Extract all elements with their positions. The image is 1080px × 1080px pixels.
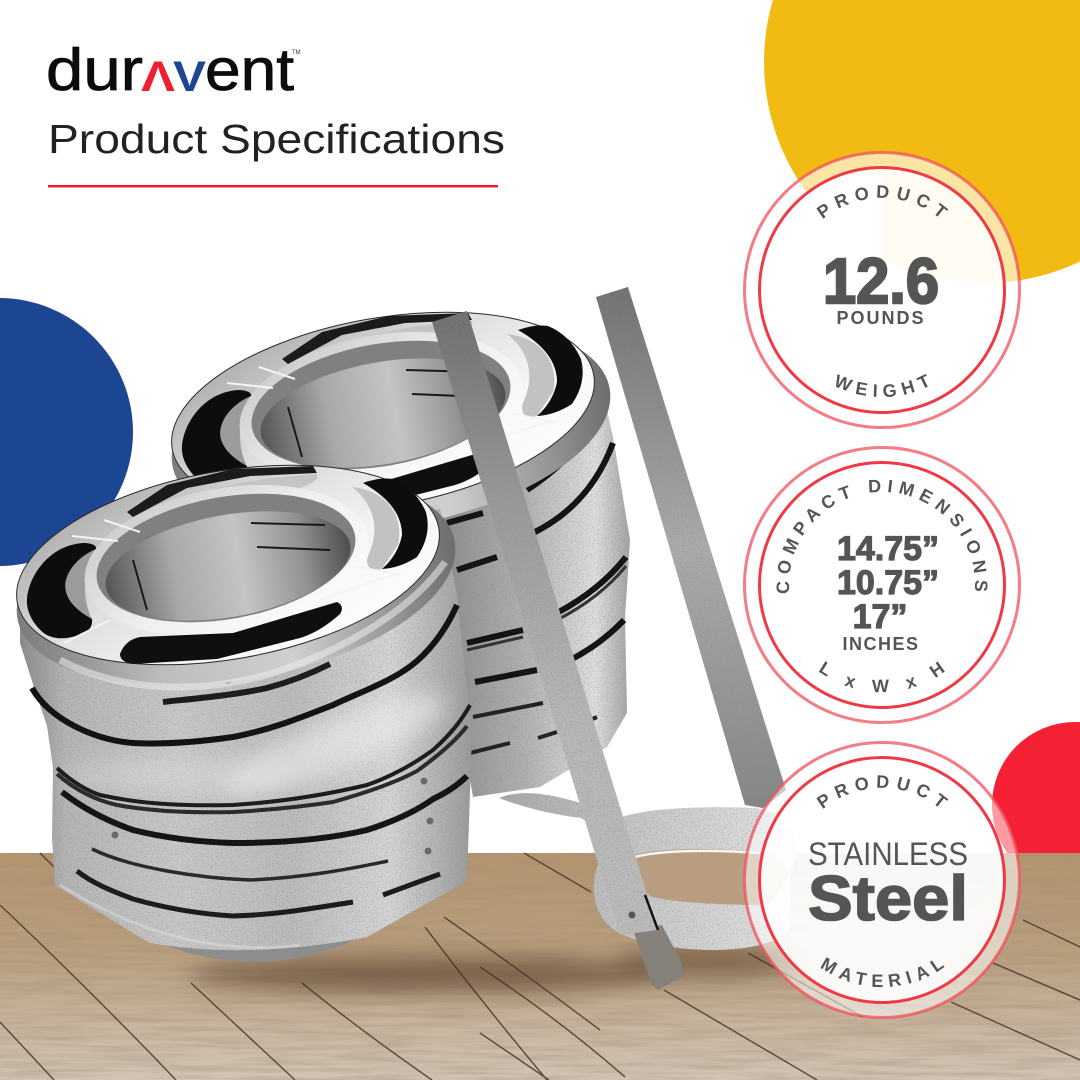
rear metal strap xyxy=(596,287,786,808)
logo: duravent: V xyxy=(173,53,206,101)
red decorative circle xyxy=(992,722,1080,888)
logo: duravent xyxy=(46,37,301,103)
heading underline xyxy=(48,185,498,188)
curved label: L x W x H: L x W x H xyxy=(819,661,945,692)
logo: duravent: Λ xyxy=(141,53,175,101)
shadow under pipes xyxy=(190,947,805,993)
dimension values: 10.75” xyxy=(837,564,939,602)
weight value: 12.6 xyxy=(823,245,939,317)
rear vent pipe xyxy=(155,282,630,797)
front vent pipe xyxy=(0,435,472,962)
badge: product material xyxy=(743,741,1021,1019)
curved label: product: PRODUCT xyxy=(816,775,948,809)
heading: Product Specifications: Product Specifications xyxy=(48,116,505,162)
curved label: compact dimensions: COMPACT DIMENSIONS xyxy=(776,480,988,594)
metal strap band ring xyxy=(499,793,797,950)
badge: compact dimensions xyxy=(743,446,1021,724)
material line: stainless: STAINLESS xyxy=(808,836,968,872)
dimension values xyxy=(837,530,939,636)
dimension values: 14.75” xyxy=(837,530,939,568)
curved label: weight: WEIGHT xyxy=(836,374,928,397)
logo: duravent: dur xyxy=(46,37,143,103)
curved label: product: PRODUCT xyxy=(816,185,948,219)
logo: duravent: TM xyxy=(292,50,301,56)
front metal strap xyxy=(432,311,685,990)
yellow decorative circle xyxy=(764,0,1080,283)
badge: product weight xyxy=(743,151,1021,429)
material line: steel: Steel xyxy=(808,864,968,934)
logo: duravent: ent xyxy=(205,37,294,103)
unit: pounds: POUNDS xyxy=(836,308,926,328)
blue decorative circle xyxy=(0,298,133,566)
dimension values: 17” xyxy=(853,598,907,636)
unit: inches: INCHES xyxy=(842,634,920,654)
curved label: material: MATERIAL xyxy=(820,957,944,988)
wooden floor xyxy=(0,853,1080,1080)
